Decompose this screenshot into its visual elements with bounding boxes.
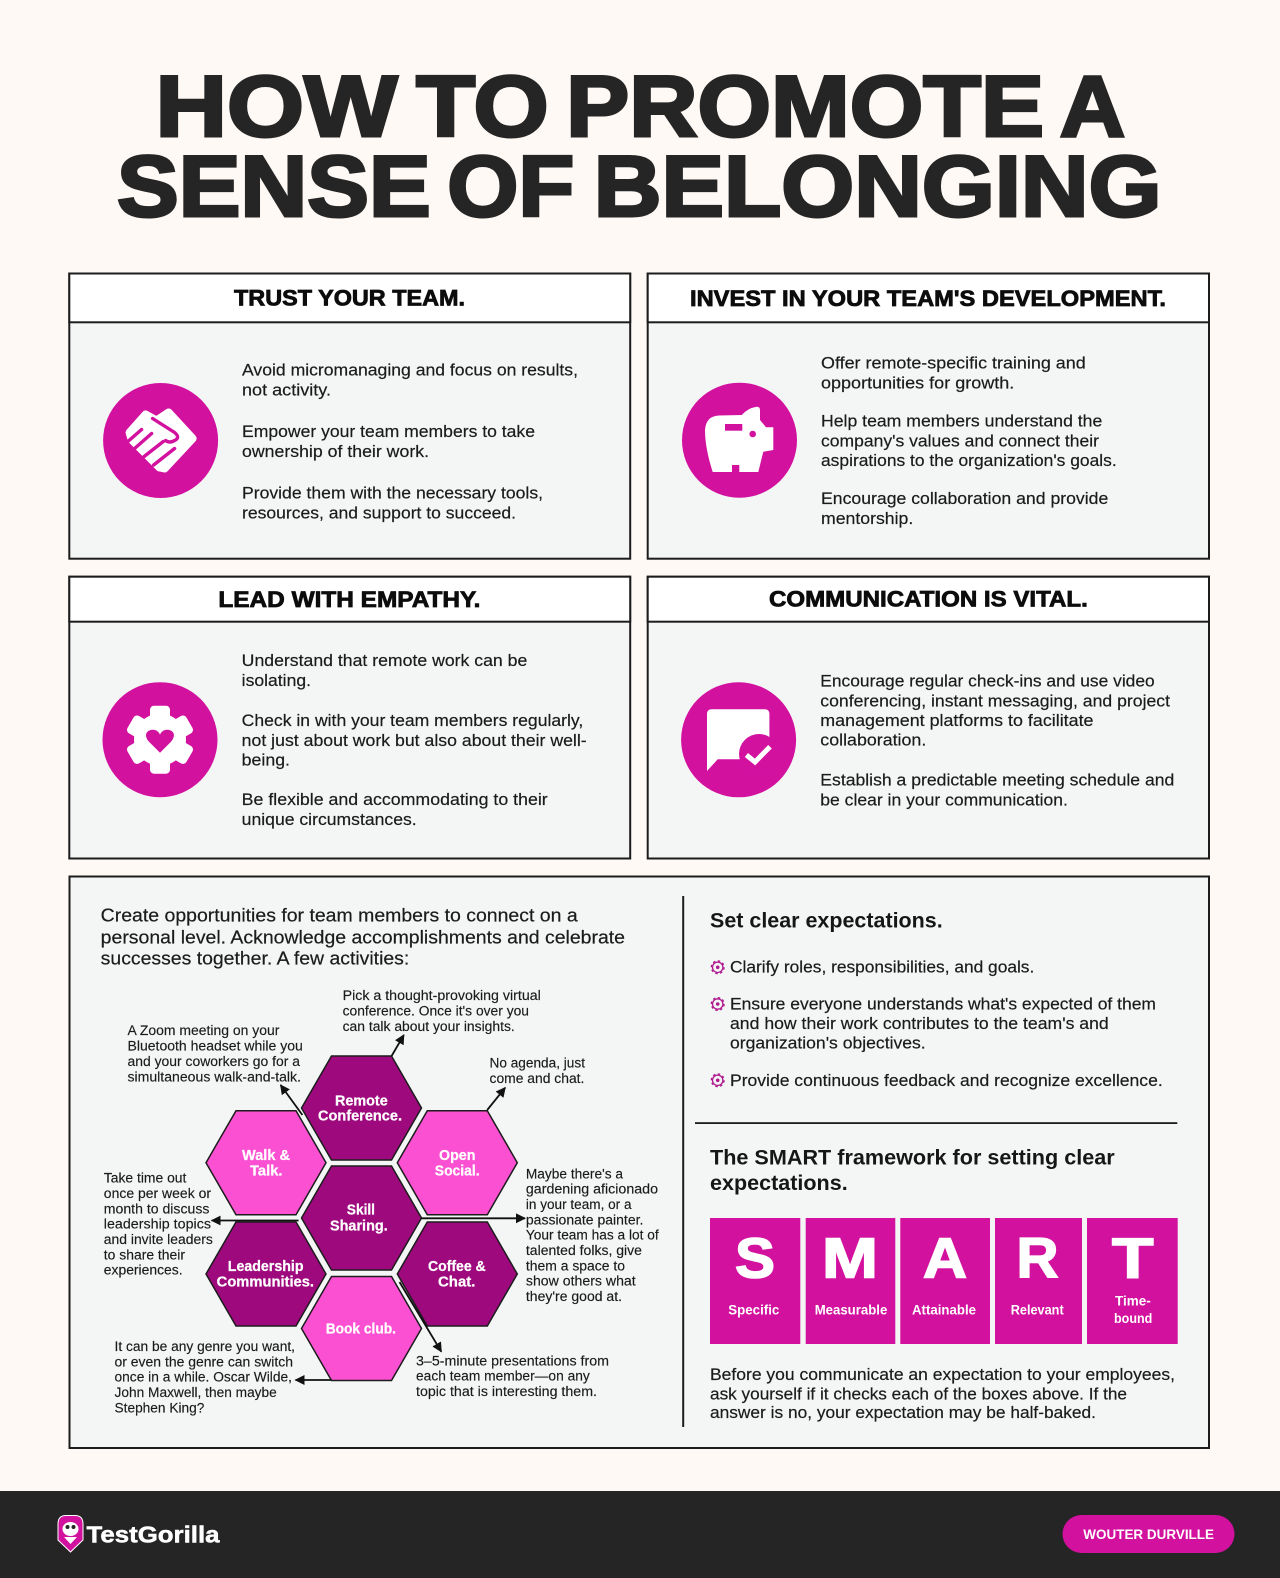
annotation: remote conference: conference. Once it's over you <box>343 1004 529 1018</box>
hexagon: skill sharing: Skill <box>347 1203 375 1219</box>
panel: communication is vital <box>648 577 1209 858</box>
hexagon: remote conference: Conference. <box>318 1108 402 1124</box>
annotation: leadership communities: to share their <box>104 1247 186 1262</box>
annotation: remote conference <box>343 988 541 1034</box>
title: HOW <box>156 59 398 155</box>
annotation: skill sharing: Maybe there's a <box>526 1166 623 1181</box>
text: invest: opportunities for growth. <box>821 373 1014 392</box>
title <box>117 59 1162 235</box>
hexagon: leadership communities: Communities. <box>217 1274 314 1290</box>
text: trust your team: not activity. <box>242 381 331 400</box>
text: communication: Encourage regular check-ins and use video <box>820 672 1155 691</box>
smart: specific: Specific <box>728 1302 780 1317</box>
annotation: skill sharing: talented folks, give <box>526 1243 642 1258</box>
smart: relevant: Relevant <box>1011 1302 1064 1317</box>
text: invest: aspirations to the organization's goals. <box>821 451 1117 470</box>
text: lead with empathy: Be flexible and accommodating to their <box>242 790 548 809</box>
text: before you communicate <box>710 1365 1175 1422</box>
heading: set clear expectations: Set clear expectations. <box>710 908 943 932</box>
text: trust your team: Empower your team members to take <box>242 422 535 441</box>
smart grid <box>710 1218 1178 1344</box>
intro text <box>101 905 625 968</box>
title: BELONGING <box>594 139 1162 235</box>
annotation: skill sharing: them a space to <box>526 1258 625 1273</box>
hexagon: skill sharing: Sharing. <box>330 1218 388 1234</box>
hexagon: walk and talk <box>206 1111 326 1215</box>
text: invest: mentorship. <box>821 509 913 528</box>
list: expectations: and how their work contributes to the team's and <box>730 1014 1109 1033</box>
smart: measurable <box>806 1218 895 1344</box>
list: expectations: Ensure everyone understands what's expected of them <box>730 994 1156 1013</box>
annotation: remote conference: can talk about your insights. <box>343 1019 515 1034</box>
heading: smart framework: expectations. <box>710 1171 848 1195</box>
annotation: coffee and chat: 3–5-minute presentations from <box>416 1353 609 1368</box>
hexagon: walk and talk: Talk. <box>250 1164 282 1180</box>
intro text: Create opportunities for team members to connect on a <box>101 905 578 926</box>
text: lead with empathy: Check in with your team members regularly, <box>242 711 583 730</box>
text: trust your team: Provide them with the necessary tools, <box>242 483 543 502</box>
icon: gear with heart <box>102 682 218 797</box>
annotation: skill sharing: in your team, or a <box>526 1197 632 1212</box>
annotation: skill sharing: show others what <box>526 1274 636 1289</box>
text: lead with empathy: Understand that remote work can be <box>242 651 527 670</box>
annotation: coffee and chat: topic that is interesting them. <box>416 1384 597 1399</box>
annotation: walk and talk: Bluetooth headset while you <box>128 1038 303 1054</box>
text: lead with empathy <box>242 651 587 829</box>
hexagon chart <box>206 1056 517 1380</box>
author pill: WOUTER DURVILLE <box>1083 1527 1214 1542</box>
arrow: leadership communities <box>212 1220 299 1222</box>
arrow: skill sharing <box>421 1217 525 1219</box>
annotation: leadership communities: and invite leaders <box>104 1232 213 1247</box>
text: before you communicate: Before you communicate an expectation to your employees, <box>710 1365 1175 1384</box>
heading: trust your team: TRUST YOUR TEAM. <box>234 286 465 311</box>
smart: specific: S <box>735 1226 775 1290</box>
smart: time-bound <box>1087 1218 1178 1344</box>
smart: attainable <box>900 1218 990 1344</box>
text: communication: collaboration. <box>820 731 926 750</box>
text: communication: be clear in your communication. <box>820 790 1068 809</box>
text: communication: conferencing, instant messaging, and project <box>820 691 1170 710</box>
smart: attainable: A <box>923 1226 967 1290</box>
panel: invest in your team's development <box>648 274 1209 559</box>
annotation: book club: John Maxwell, then maybe <box>114 1385 277 1400</box>
annotation: book club: or even the genre can switch <box>114 1354 293 1369</box>
hexagon: skill sharing <box>302 1166 422 1270</box>
text: invest: Help team members understand the <box>821 412 1102 431</box>
icon: handshake <box>103 383 218 498</box>
arrow: coffee and chat <box>400 1282 441 1352</box>
panel: trust your team <box>69 274 630 559</box>
smart: time-bound: T <box>1112 1226 1154 1290</box>
annotation: coffee and chat <box>416 1353 609 1399</box>
text: invest: Encourage collaboration and provide <box>821 489 1108 508</box>
text: invest: company's values and connect their <box>821 432 1099 451</box>
text: trust your team: Avoid micromanaging and focus on results, <box>242 361 578 380</box>
footer <box>0 1491 1280 1578</box>
bullet icon 2 <box>711 998 724 1010</box>
smart: time-bound: Time- <box>1115 1294 1151 1309</box>
bullet icon 3 <box>711 1074 724 1087</box>
smart: measurable: Measurable <box>815 1302 888 1317</box>
title: A <box>1060 59 1125 155</box>
hexagon: remote conference <box>302 1056 422 1160</box>
hexagon: coffee and chat: Chat. <box>438 1274 475 1290</box>
arrow: open social <box>487 1088 505 1110</box>
text: lead with empathy: isolating. <box>242 671 311 690</box>
arrow: book club <box>296 1379 331 1381</box>
annotation: leadership communities: once per week or <box>104 1186 212 1201</box>
text: before you communicate: ask yourself if it checks each of the boxes above. If the <box>710 1384 1127 1403</box>
annotation: coffee and chat: each team member—on any <box>416 1369 590 1384</box>
annotation: skill sharing: Your team has a lot of <box>526 1228 659 1243</box>
annotation: open social <box>490 1056 585 1086</box>
logo wordmark: TestGorilla <box>86 1522 220 1548</box>
hexagon: coffee and chat <box>397 1222 517 1326</box>
heading: invest: INVEST IN YOUR TEAM'S DEVELOPMENT. <box>690 286 1166 311</box>
text: invest: Offer remote-specific training and <box>821 353 1086 372</box>
author pill <box>1062 1515 1234 1553</box>
intro text: personal level. Acknowledge accomplishments and celebrate <box>101 926 625 947</box>
smart: relevant <box>995 1218 1082 1344</box>
hexagon: open social: Open <box>439 1148 475 1164</box>
text: communication: Establish a predictable meeting schedule and <box>820 771 1174 790</box>
annotation: leadership communities <box>104 1171 213 1278</box>
hexagon: leadership communities: Leadership <box>228 1259 304 1275</box>
annotation: leadership communities: Take time out <box>104 1171 187 1186</box>
text: lead with empathy: being. <box>242 750 290 770</box>
hexagon: book club: Book club. <box>326 1322 396 1338</box>
text: lead with empathy: not just about work but also about their well- <box>242 731 587 750</box>
annotation: skill sharing <box>526 1166 659 1304</box>
title: SENSE <box>117 139 431 235</box>
list: expectations: organization's objectives. <box>730 1034 926 1053</box>
icon: chat bubble with check <box>681 682 796 797</box>
text: trust your team: resources, and support to succeed. <box>242 503 516 522</box>
hexagon: coffee and chat: Coffee & <box>428 1259 486 1275</box>
smart: attainable: Attainable <box>912 1302 976 1317</box>
annotation: skill sharing: they're good at. <box>526 1289 622 1304</box>
heading: lead with empathy: LEAD WITH EMPATHY. <box>218 587 480 612</box>
panel: lead with empathy <box>69 577 630 858</box>
text: trust your team <box>242 361 578 522</box>
bullet icon 1 <box>711 961 724 974</box>
annotation: book club <box>114 1339 295 1415</box>
annotation: walk and talk <box>128 1023 303 1084</box>
annotation: leadership communities: leadership topics <box>104 1217 211 1232</box>
annotation: open social: No agenda, just <box>490 1056 585 1071</box>
title: OF <box>447 139 574 235</box>
hexagon: book club <box>302 1276 422 1380</box>
text: before you communicate: answer is no, your expectation may be half-baked. <box>710 1403 1096 1422</box>
panel: activities and expectations <box>70 876 1209 1448</box>
annotation: skill sharing: gardening aficionado <box>526 1182 658 1197</box>
arrow: remote conference <box>392 1035 404 1056</box>
icon: testgorilla logo mark <box>58 1516 83 1552</box>
list: expectations: Clarify roles, responsibilities, and goals. <box>730 958 1034 977</box>
intro text: successes together. A few activities: <box>101 947 409 968</box>
hexagon: open social: Social. <box>435 1164 480 1180</box>
annotation: leadership communities: month to discuss <box>104 1201 210 1216</box>
title: TO <box>416 59 549 155</box>
text: lead with empathy: unique circumstances. <box>242 810 417 829</box>
hexagon: walk and talk: Walk & <box>242 1148 291 1164</box>
smart: specific <box>710 1218 800 1344</box>
list: expectations: Provide continuous feedback and recognize excellence. <box>730 1071 1163 1090</box>
annotation: open social: come and chat. <box>490 1071 584 1086</box>
annotation: remote conference: Pick a thought-provoking virtual <box>343 988 541 1003</box>
text: trust your team: ownership of their work. <box>242 442 429 461</box>
annotation: walk and talk: simultaneous walk-and-talk. <box>128 1070 301 1084</box>
annotation: leadership communities: experiences. <box>104 1263 183 1278</box>
smart: time-bound: bound <box>1114 1311 1152 1326</box>
list: expectations <box>711 958 1163 1090</box>
annotation: book club: It can be any genre you want, <box>114 1339 295 1354</box>
text: invest <box>821 353 1117 528</box>
heading: smart framework: The SMART framework for setting clear <box>710 1145 1115 1169</box>
hexagon: remote conference: Remote <box>335 1094 388 1110</box>
annotation: book club: once in a while. Oscar Wilde, <box>114 1370 292 1385</box>
icon: piggy bank <box>682 383 797 498</box>
heading: smart framework <box>710 1145 1115 1195</box>
smart: measurable: M <box>822 1226 878 1290</box>
arrow: walk and talk <box>281 1085 302 1115</box>
annotation: walk and talk: and your coworkers go for a <box>128 1054 300 1069</box>
hexagon: leadership communities <box>206 1222 326 1326</box>
annotation: book club: Stephen King? <box>114 1400 204 1415</box>
smart: relevant: R <box>1016 1226 1058 1290</box>
annotation: skill sharing: passionate painter. <box>526 1212 643 1227</box>
title: PROMOTE <box>566 59 1044 155</box>
text: communication <box>820 672 1174 809</box>
heading: communication: COMMUNICATION IS VITAL. <box>769 587 1088 612</box>
text: communication: management platforms to facilitate <box>820 711 1094 730</box>
annotation: walk and talk: A Zoom meeting on your <box>128 1023 280 1038</box>
hexagon: open social <box>397 1111 517 1215</box>
